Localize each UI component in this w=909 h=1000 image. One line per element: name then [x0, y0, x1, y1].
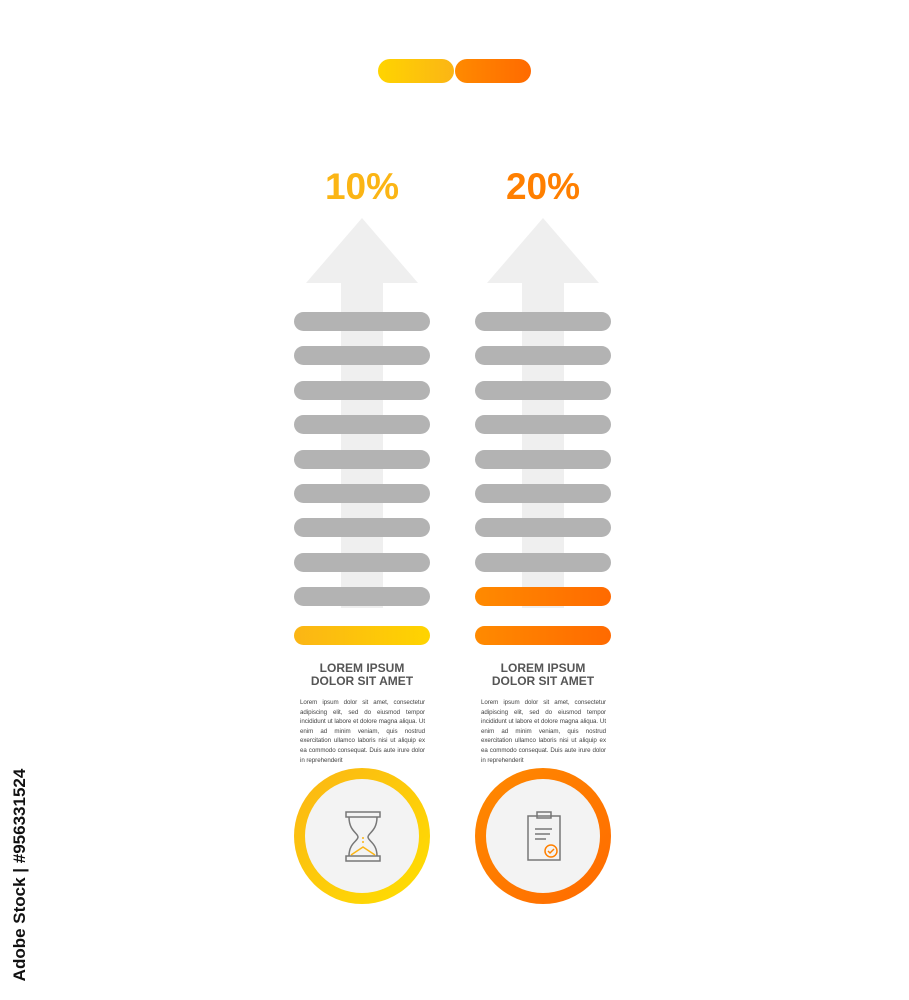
icon circle: clipboard [475, 768, 611, 904]
text right: Lorem ipsum dolor sit amet, consectetur adipiscing elit, sed do eiusmod tempor incididunt ut labore et dolore magna aliqua. Ut enim ad minim veniam, quis nostrud exercitation ullamco laboris nisi ut aliquip ex ea commodo consequat. Duis aute irure dolor in reprehenderit [481, 699, 606, 764]
icon circle: hourglass [294, 768, 430, 904]
arrow left [306, 218, 418, 608]
heading left [311, 661, 413, 688]
bars right [475, 312, 611, 645]
top legend pills [378, 59, 531, 83]
heading left: DOLOR SIT AMET [311, 674, 413, 688]
text left: Lorem ipsum dolor sit amet, consectetur adipiscing elit, sed do eiusmod tempor incididunt ut labore et dolore magna aliqua. Ut enim ad minim veniam, quis nostrud exercitation ullamco laboris nisi ut aliquip ex ea commodo consequat. Duis aute irure dolor in reprehenderit [300, 699, 425, 764]
percentage 20%: 20% [506, 166, 580, 207]
arrow right [487, 218, 599, 608]
heading right: DOLOR SIT AMET [492, 674, 594, 688]
watermark credit: Adobe Stock | #956331524 [10, 769, 29, 981]
heading left: LOREM IPSUM [320, 661, 404, 675]
percentage 10%: 10% [325, 166, 399, 207]
bars left [294, 312, 430, 645]
heading right: LOREM IPSUM [501, 661, 585, 675]
heading right [492, 661, 594, 688]
